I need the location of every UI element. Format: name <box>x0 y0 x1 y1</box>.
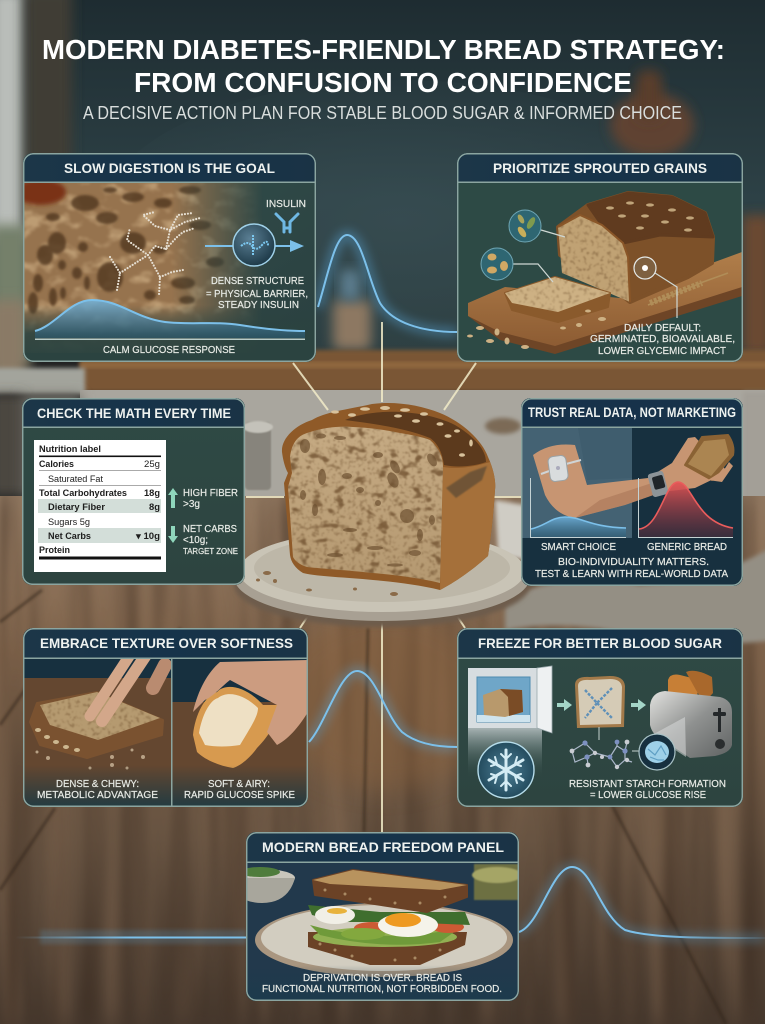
text: bio-individuality: TEST & LEARN WITH REAL-WORLD DATA <box>535 568 728 580</box>
arrow: freezer to slice <box>557 699 572 711</box>
panel: trust real data <box>521 398 743 586</box>
text: daily default <box>590 324 734 354</box>
labels: smart choice and generic bread <box>541 542 727 550</box>
crumb face <box>285 425 447 590</box>
glucose curve: bottom right spike <box>519 867 765 938</box>
chart: calm glucose curve <box>35 300 305 340</box>
header: freeze <box>457 628 743 659</box>
nutrition label: Saturated Fat <box>48 474 103 484</box>
scattered grains <box>467 310 606 349</box>
bread slice on board <box>500 275 615 322</box>
callout lines <box>513 230 677 318</box>
panel: check the math <box>22 398 245 585</box>
wheat stalk <box>648 273 728 305</box>
header: trust real data <box>521 398 743 428</box>
header: embrace texture <box>23 628 308 659</box>
bowl of greens <box>229 867 295 903</box>
oil bottle <box>472 864 522 900</box>
text: resistant starch: RESISTANT STARCH FORMATION <box>569 778 726 790</box>
arrow: glucose release <box>205 240 304 252</box>
text: dense and chewy: DENSE & CHEWY: <box>56 778 139 790</box>
header: slow digestion: SLOW DIGESTION IS THE GOAL <box>64 160 275 176</box>
arrow: high fiber up <box>168 488 178 508</box>
nutrition label: Nutrition label <box>39 444 101 454</box>
panel: embrace texture <box>23 628 308 807</box>
title <box>42 34 725 98</box>
nutrition label: Total Carbohydrates <box>39 488 127 498</box>
text: dense structure: DENSE STRUCTURE <box>211 275 304 287</box>
header: check the math <box>22 398 245 428</box>
text: deprivation is over <box>262 972 502 995</box>
icon: molecule sphere <box>233 224 275 266</box>
labels: smart choice and generic bread: SMART CHOICE <box>541 541 616 553</box>
connector from slice to molecules <box>598 727 600 740</box>
text: deprivation is over: FUNCTIONAL NUTRITION, NOT FORBIDDEN FOOD. <box>262 983 502 995</box>
dense bread slice <box>30 690 165 758</box>
nutrition label: Protein <box>39 545 70 555</box>
panel: modern bread freedom <box>229 832 522 1001</box>
text: daily default: LOWER GLYCEMIC IMPACT <box>598 345 727 357</box>
text: high fiber: >3g <box>183 498 200 510</box>
connector lines from central loaf to panels <box>246 322 521 832</box>
icon: snowflake <box>478 742 534 798</box>
bread in hand <box>685 435 733 480</box>
text: bio-individuality: BIO-INDIVIDUALITY MATTERS. <box>558 556 709 568</box>
panel: slow digestion <box>14 153 316 362</box>
plate <box>255 903 513 977</box>
nutrition label <box>34 440 166 572</box>
panel: freeze for better blood sugar <box>457 628 743 807</box>
text: dense and chewy: METABOLIC ADVANTAGE <box>37 789 158 801</box>
seeds on crust <box>331 406 473 457</box>
text: high fiber: HIGH FIBER <box>183 487 238 499</box>
freezer with loaf <box>468 666 552 778</box>
icon: insulin antibody <box>276 214 298 232</box>
hand pressing dense bread <box>90 655 165 721</box>
text: net carbs: <10g; <box>183 534 208 546</box>
glucose curve: top spike <box>318 235 457 332</box>
header: check the math: CHECK THE MATH EVERY TIME <box>37 405 231 421</box>
text: resistant starch: = LOWER GLUCOSE RISE <box>590 789 706 801</box>
text: soft and airy: SOFT & AIRY: <box>208 778 270 790</box>
starch molecule network <box>110 212 200 295</box>
title: MODERN DIABETES-FRIENDLY BREAD STRATEGY: <box>42 34 725 65</box>
header: freeze: FREEZE FOR BETTER BLOOD SUGAR <box>478 635 722 651</box>
text: bio-individuality <box>535 556 728 580</box>
divider between comparison images <box>171 658 172 807</box>
text: dense structure: = PHYSICAL BARRIER, <box>206 288 308 300</box>
soft white bread <box>193 687 280 768</box>
header: sprouted grains: PRIORITIZE SPROUTED GRAINS <box>493 160 707 176</box>
cutting board <box>468 252 742 354</box>
plate <box>234 530 530 627</box>
icon: resistant starch circle <box>639 734 675 770</box>
crumbs on plate <box>256 571 398 596</box>
text: dense structure: STEADY INSULIN <box>218 299 299 311</box>
icon: grains <box>481 248 513 280</box>
label: calm glucose response: CALM GLUCOSE RESPONSE <box>103 344 235 356</box>
text: soft and airy <box>184 778 295 801</box>
nutrition label: Dietary Fiber <box>48 502 106 512</box>
central loaf of bread on plate <box>234 403 530 627</box>
glucose curve: middle spike <box>309 671 457 747</box>
nutrition label: 18g <box>144 488 160 498</box>
toaster with toast <box>650 671 732 758</box>
chart: smart choice <box>530 478 626 538</box>
label: insulin: INSULIN <box>266 198 306 210</box>
glucose sensor <box>541 455 581 482</box>
nutrition label: 8g <box>149 502 160 512</box>
text: net carbs <box>183 523 238 556</box>
labels: smart choice and generic bread: GENERIC BREAD <box>647 541 727 553</box>
nutrition label: Calories <box>39 459 74 469</box>
text: dense and chewy <box>37 778 158 801</box>
header: sprouted grains <box>457 153 743 183</box>
sandwich <box>308 870 470 965</box>
text: daily default: GERMINATED, BIOAVAILABLE, <box>590 333 735 345</box>
text: net carbs: NET CARBS <box>183 523 237 535</box>
header: embrace texture: EMBRACE TEXTURE OVER SOFTNESS <box>40 635 293 651</box>
smartwatch <box>647 470 669 498</box>
nutrition label: Sugars 5g <box>48 517 90 527</box>
icon: sprouted seeds <box>509 210 541 242</box>
bread crumb macro image <box>24 183 257 345</box>
arm with sensor and bread <box>533 435 733 518</box>
panel: prioritize sprouted grains <box>457 153 743 362</box>
text: high fiber <box>183 487 238 510</box>
sprouted loaf <box>555 193 713 305</box>
text: dense structure <box>206 276 308 308</box>
nutrition label: ▾ 10g <box>135 531 160 541</box>
molecule chain <box>570 740 640 769</box>
nutrition label: Net Carbs <box>48 531 91 541</box>
arrow: net carbs down <box>168 526 178 543</box>
chart: generic bread <box>638 478 733 538</box>
frozen bread slice <box>575 676 625 728</box>
icon: glowing highlight <box>634 257 656 279</box>
text: resistant starch <box>569 778 726 801</box>
crumbs <box>36 748 145 770</box>
arrow: slice to toaster <box>631 699 646 711</box>
header: slow digestion <box>23 153 316 183</box>
header: freedom panel: MODERN BREAD FREEDOM PANEL <box>262 839 504 855</box>
text: soft and airy: RAPID GLUCOSE SPIKE <box>184 789 295 801</box>
text: net carbs: TARGET ZONE <box>183 546 238 556</box>
hand squeezing soft bread <box>193 660 308 745</box>
text: deprivation is over: DEPRIVATION IS OVER. BREAD IS <box>303 972 462 984</box>
title: FROM CONFUSION TO CONFIDENCE <box>134 67 632 98</box>
glucose curve: baseline left <box>15 930 246 944</box>
nutrition label: 25g <box>144 459 160 469</box>
subtitle: A DECISIVE ACTION PLAN FOR STABLE BLOOD SUGAR & INFORMED CHOICE <box>83 103 682 123</box>
text: daily default: DAILY DEFAULT: <box>624 322 701 334</box>
header: freedom panel <box>246 832 519 863</box>
